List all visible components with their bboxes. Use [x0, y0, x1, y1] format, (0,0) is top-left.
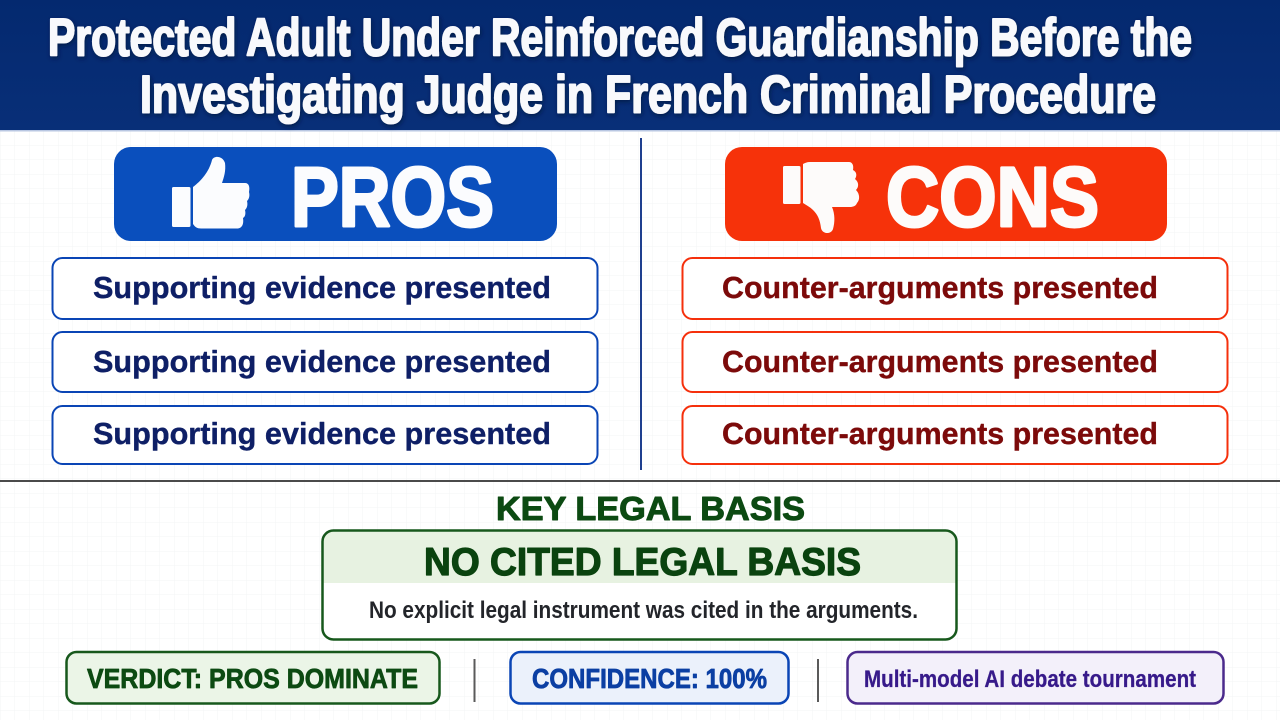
cons heading badge: CONS: [886, 150, 1099, 244]
cons row 3: Counter-arguments presented: [722, 416, 1158, 451]
legal basis description: No explicit legal instrument was cited in the arguments.: [369, 597, 918, 624]
pros heading badge: [114, 147, 557, 244]
confidence badge: CONFIDENCE: 100%: [532, 663, 767, 694]
pros row 2: [52, 332, 598, 392]
cons row 3: [682, 406, 1228, 464]
legal basis heading: NO CITED LEGAL BASIS: [424, 541, 861, 584]
icon: thumbs up: [172, 157, 249, 228]
cons row 2: [682, 332, 1228, 392]
pros row 2: Supporting evidence presented: [93, 344, 551, 379]
header banner with title: [0, 0, 1280, 132]
verdict badge: VERDICT: PROS DOMINATE: [87, 663, 418, 694]
source badge: Multi-model AI debate tournament: [864, 666, 1196, 693]
key legal basis heading: KEY LEGAL BASIS: [496, 490, 805, 527]
pros row 1: Supporting evidence presented: [93, 270, 551, 305]
pros row 1: [52, 258, 598, 319]
cons row 2: Counter-arguments presented: [722, 344, 1158, 379]
pros heading badge: PROS: [291, 150, 494, 244]
confidence badge: [510, 652, 788, 704]
icon: thumbs down: [783, 162, 859, 233]
cons row 1: Counter-arguments presented: [722, 270, 1158, 305]
panel: cons: [682, 147, 1228, 464]
pros row 3: Supporting evidence presented: [93, 416, 551, 451]
panel: pros: [52, 147, 598, 464]
cons heading badge: [725, 147, 1167, 244]
pros row 3: [52, 406, 598, 464]
title: [48, 8, 1192, 124]
verdict badge: [66, 652, 440, 704]
cons row 1: [682, 258, 1228, 319]
panel: legal basis: [322, 530, 956, 640]
source badge: [848, 652, 1224, 704]
